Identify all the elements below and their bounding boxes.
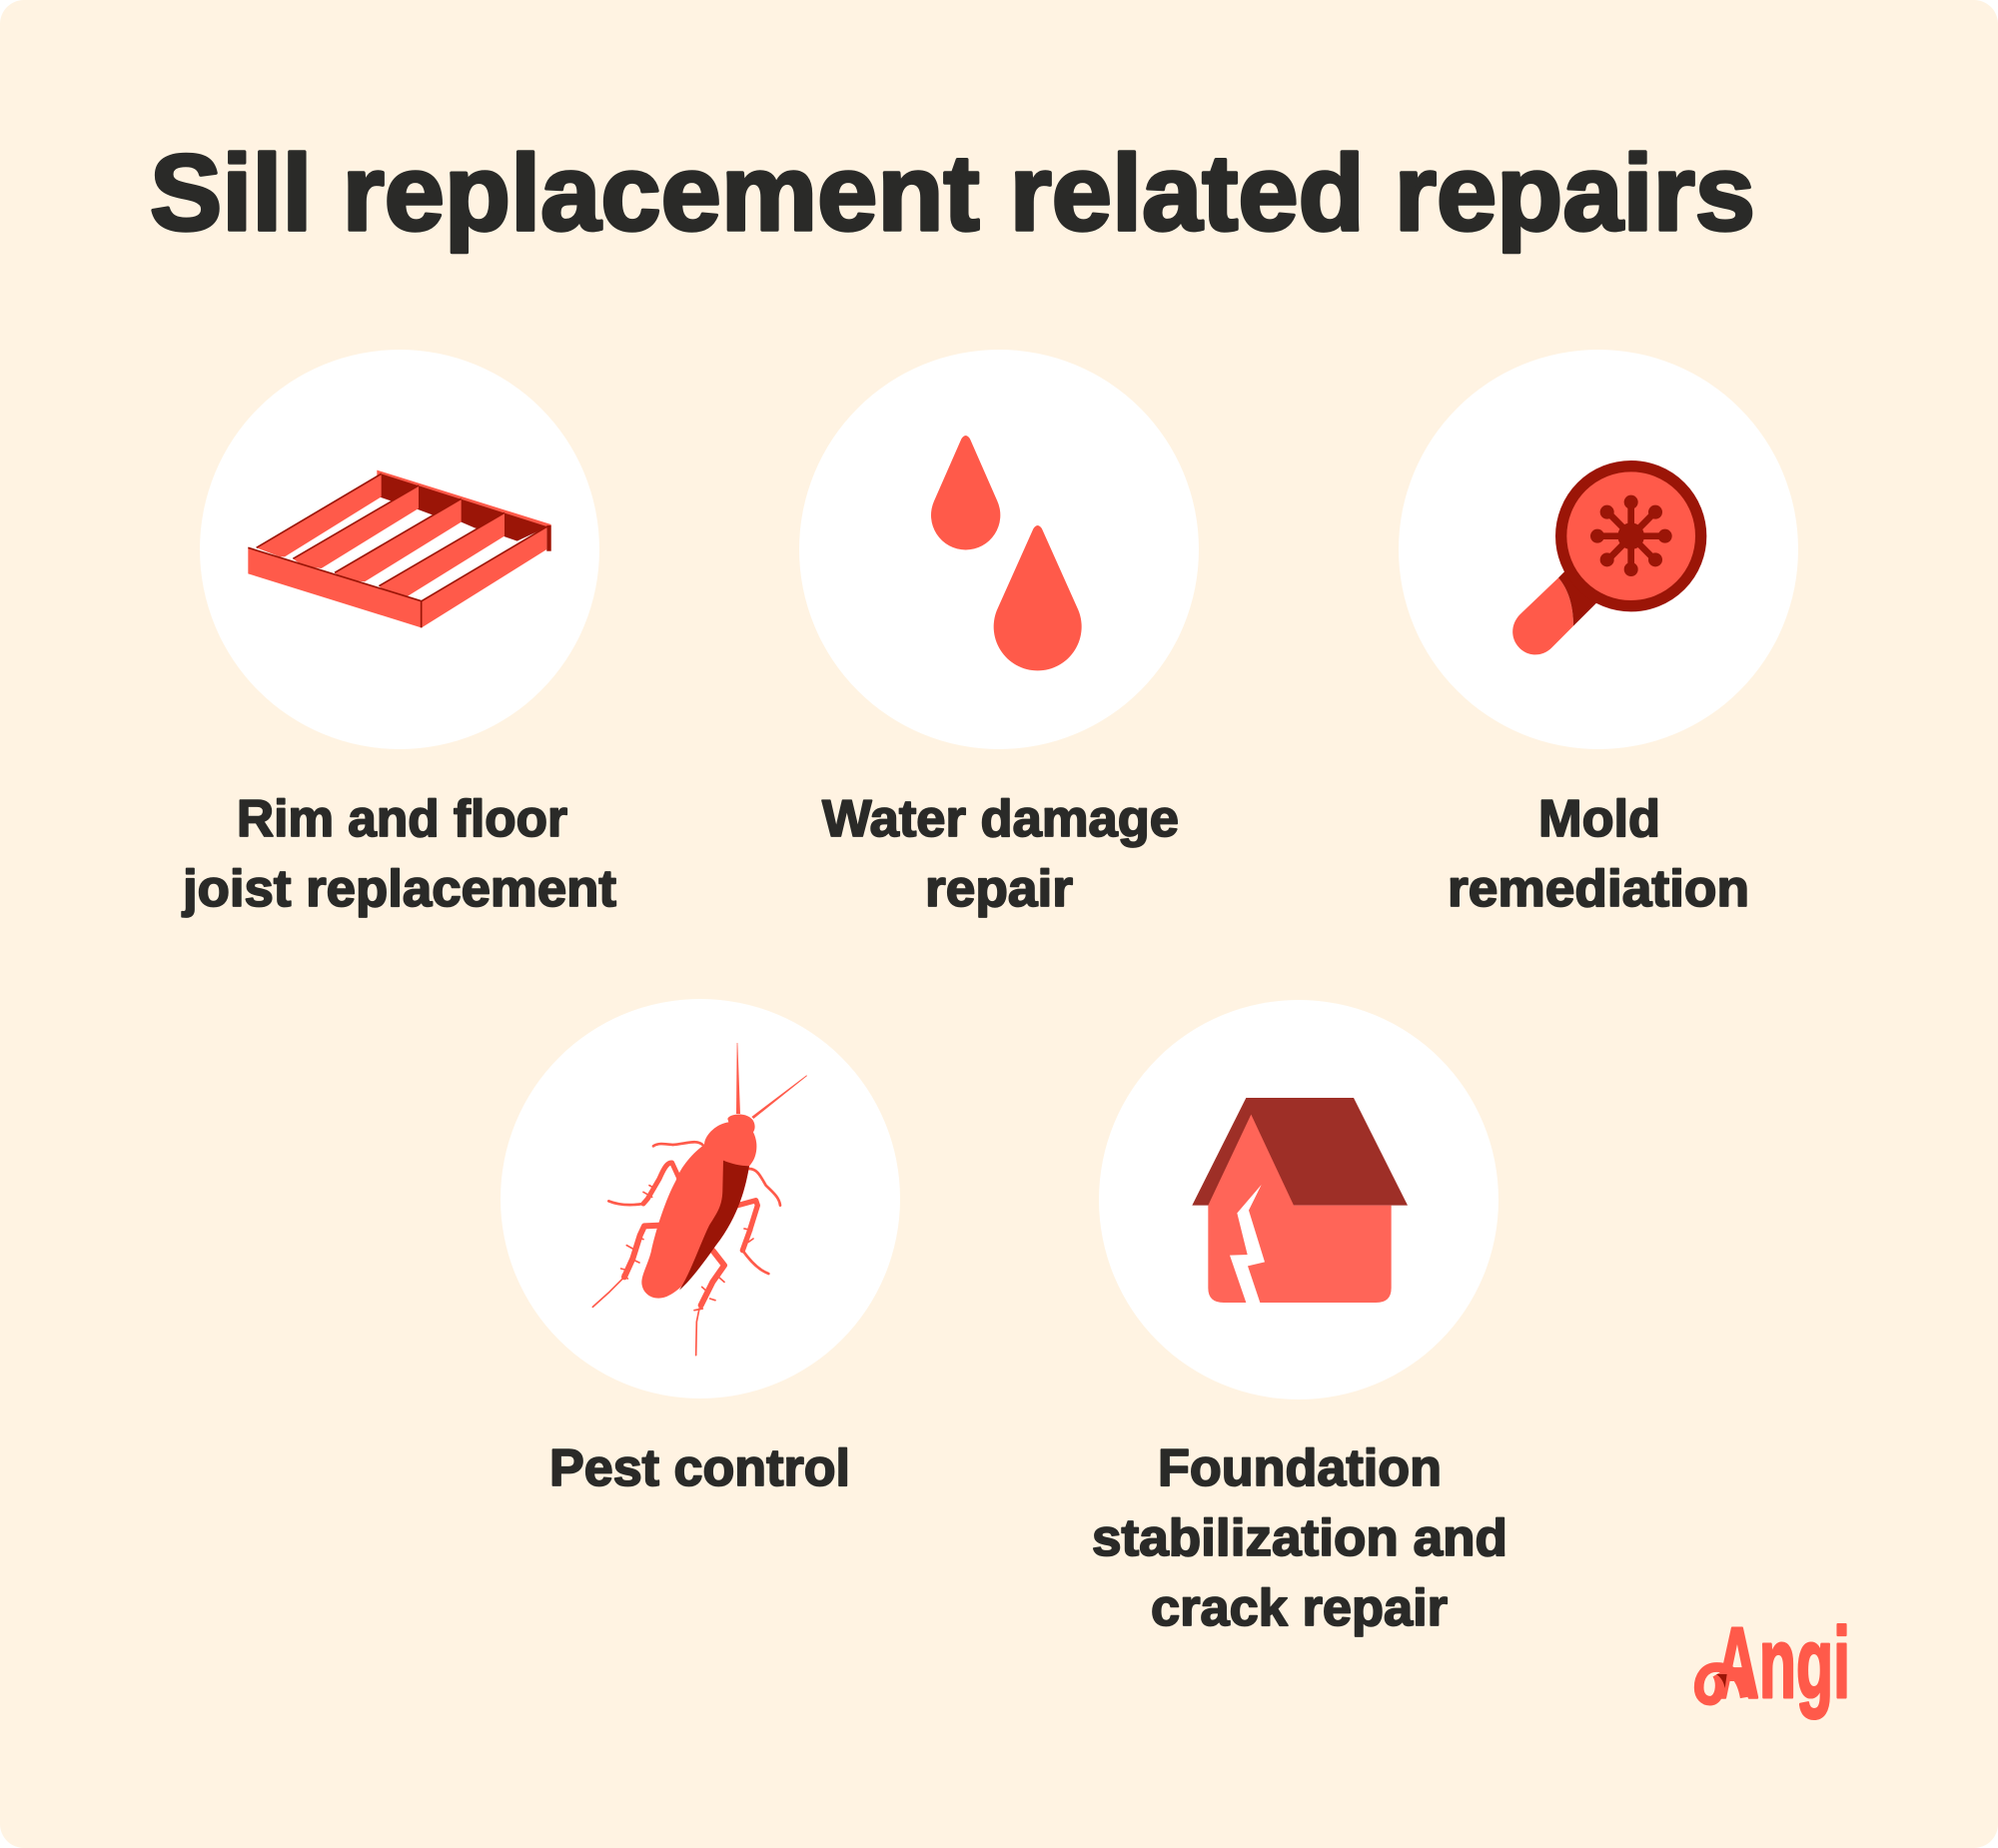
label: joist replacement <box>182 860 616 918</box>
label <box>182 790 616 918</box>
icon: floor joist frame <box>248 470 551 627</box>
icon: water drops <box>931 436 1082 670</box>
label: crack repair <box>1151 1579 1448 1637</box>
label: repair <box>925 860 1073 918</box>
icon: cockroach <box>592 1043 807 1356</box>
panel: foundation stabilization and crack repair <box>1092 1000 1507 1637</box>
label: stabilization and <box>1092 1509 1507 1567</box>
label: remediation <box>1448 860 1749 918</box>
logo: Angi: Angi <box>1715 1607 1850 1719</box>
panel: mold remediation <box>1399 350 1798 918</box>
title: Sill replacement related repairs <box>150 132 1755 253</box>
label: Pest control <box>549 1439 850 1497</box>
icon: cracked house <box>1192 1098 1408 1303</box>
label <box>1448 790 1749 918</box>
label: Foundation <box>1158 1439 1442 1497</box>
label <box>1092 1439 1507 1637</box>
panel: rim and floor joist replacement <box>182 350 616 918</box>
label: Water damage <box>822 790 1179 848</box>
logo: Angi <box>1699 1607 1850 1719</box>
label: Mold <box>1538 790 1660 848</box>
label <box>822 790 1179 918</box>
panel: water damage repair <box>799 350 1199 918</box>
panel: pest control <box>500 999 900 1497</box>
label: Rim and floor <box>237 790 567 848</box>
icon: magnifying glass with mold spore <box>1512 466 1701 654</box>
